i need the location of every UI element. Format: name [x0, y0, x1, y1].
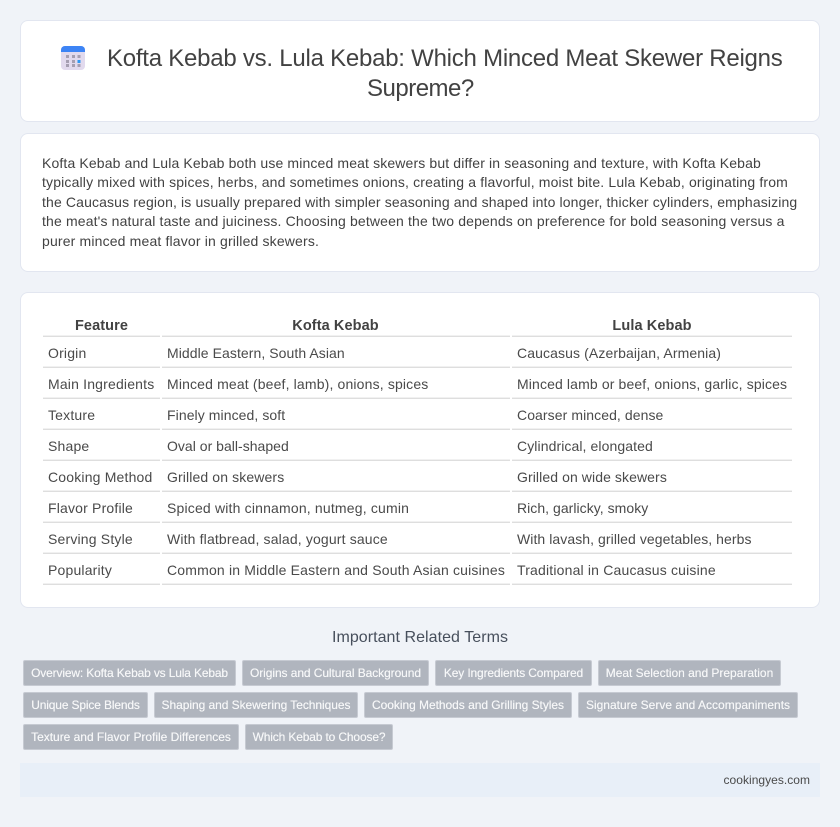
- table header: kofta: Kofta Kebab: [292, 318, 379, 334]
- title: Supreme?: [367, 75, 474, 102]
- table header: feature: Feature: [75, 318, 128, 334]
- panel: comparison table: [20, 292, 820, 608]
- intro text: [42, 155, 797, 249]
- row: cooking method: [48, 469, 667, 485]
- row: shape: Oval or ball-shaped: [167, 438, 289, 454]
- row: shape: Cylindrical, elongated: [517, 438, 653, 454]
- tags: related terms: Overview: Kofta Kebab vs Lula Kebab: [31, 666, 228, 680]
- footer credit: cookingyes.com: [724, 773, 810, 787]
- row: popularity: Traditional in Caucasus cuisine: [517, 562, 716, 578]
- intro text: purer minced meat flavor in grilled skewers.: [42, 233, 319, 249]
- tags: related terms: Which Kebab to Choose?: [253, 730, 385, 744]
- row: popularity: [48, 562, 716, 578]
- row: main ingredients: Minced meat (beef, lamb), onions, spices: [167, 376, 428, 392]
- row: serving style: [48, 531, 752, 547]
- row: flavor profile: Rich, garlicky, smoky: [517, 500, 648, 516]
- tags: related terms: Origins and Cultural Background: [250, 666, 421, 680]
- heading: related terms: Important Related Terms: [332, 629, 508, 646]
- title: Kofta Kebab vs. Lula Kebab: Which Minced Meat Skewer Reigns: [107, 45, 783, 72]
- row: origin: [48, 345, 721, 361]
- row: main ingredients: Minced lamb or beef, onions, garlic, spices: [517, 376, 787, 392]
- row: cooking method: Grilled on skewers: [167, 469, 284, 485]
- tags: related terms: Cooking Methods and Grilling Styles: [372, 698, 564, 712]
- panel: title card: [20, 20, 820, 122]
- row: shape: Shape: [48, 438, 89, 454]
- tags: related terms: Unique Spice Blends: [31, 698, 140, 712]
- row: flavor profile: Spiced with cinnamon, nutmeg, cumin: [167, 500, 409, 516]
- row: cooking method: Grilled on wide skewers: [517, 469, 667, 485]
- tags: related terms: [23, 660, 798, 750]
- row: origin: Middle Eastern, South Asian: [167, 345, 345, 361]
- row: texture: Coarser minced, dense: [517, 407, 663, 423]
- row: texture: Finely minced, soft: [167, 407, 285, 423]
- intro text: the meat's natural taste and juiciness. Choosing between the two depends on preference for bold seasoning versus a: [42, 213, 785, 229]
- tags: related terms: Texture and Flavor Profile Differences: [31, 730, 231, 744]
- table header: lula: Lula Kebab: [612, 318, 692, 334]
- intro text: the Caucasus region, is usually prepared with simpler seasoning and shaped into longer, thicker cylinders, emphasizing: [42, 194, 797, 210]
- row: flavor profile: [48, 500, 648, 516]
- row: origin: Caucasus (Azerbaijan, Armenia): [517, 345, 721, 361]
- row: popularity: Common in Middle Eastern and South Asian cuisines: [167, 562, 505, 578]
- title: [107, 45, 783, 102]
- icon: calendar: [61, 46, 85, 70]
- tags: related terms: Shaping and Skewering Techniques: [162, 698, 350, 712]
- intro text: Kofta Kebab and Lula Kebab both use minced meat skewers but differ in seasoning and texture, with Kofta Kebab: [42, 155, 761, 171]
- panel: intro: [20, 133, 820, 272]
- row: texture: [48, 407, 663, 423]
- row: serving style: With flatbread, salad, yogurt sauce: [167, 531, 388, 547]
- row: main ingredients: Main Ingredients: [48, 376, 154, 392]
- row: flavor profile: Flavor Profile: [48, 500, 133, 516]
- row: texture: Texture: [48, 407, 95, 423]
- row: origin: Origin: [48, 345, 86, 361]
- row: shape: [48, 438, 653, 454]
- row: main ingredients: [48, 376, 787, 392]
- row: serving style: Serving Style: [48, 531, 133, 547]
- tags: related terms: Signature Serve and Accompaniments: [586, 698, 790, 712]
- row: popularity: Popularity: [48, 562, 112, 578]
- row: serving style: With lavash, grilled vegetables, herbs: [517, 531, 752, 547]
- tags: related terms: Key Ingredients Compared: [444, 666, 583, 680]
- row: cooking method: Cooking Method: [48, 469, 152, 485]
- intro text: typically mixed with spices, herbs, and sometimes onions, creating a flavorful, moist bite. Lula Kebab, originating from: [42, 174, 788, 190]
- footer bar: [20, 763, 820, 797]
- tags: related terms: Meat Selection and Preparation: [606, 666, 773, 680]
